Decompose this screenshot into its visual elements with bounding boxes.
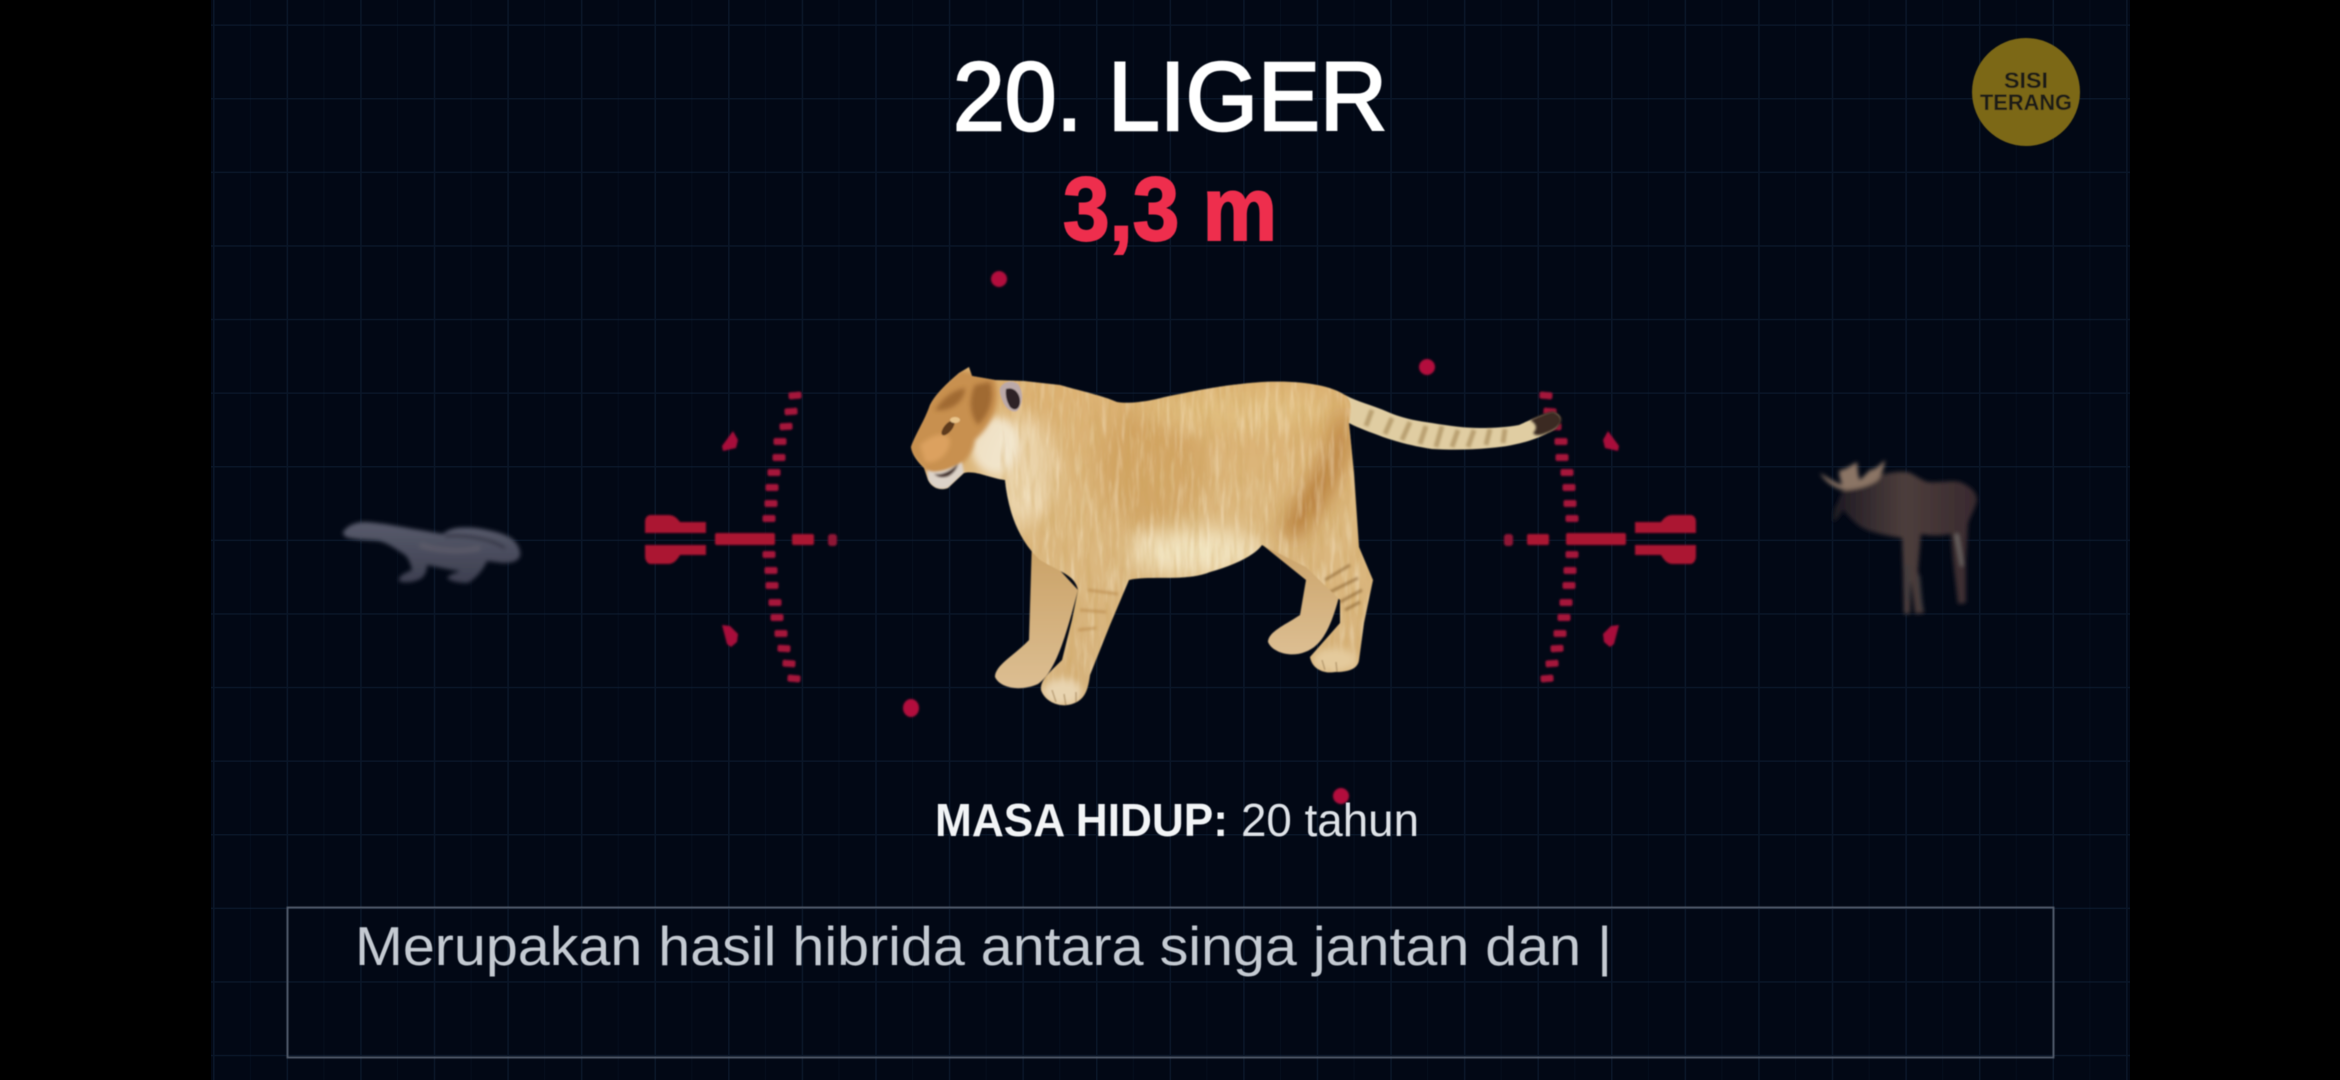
logo: Sisi Terang badge [1972, 38, 2080, 146]
lifespan label [935, 794, 1419, 846]
illustration: moose [1820, 460, 1977, 614]
reticle: left bracket [645, 391, 837, 683]
logo: Sisi Terang badge: TERANG [1980, 90, 2072, 115]
liger ear [1000, 382, 1022, 411]
fur shading and markings [971, 380, 1380, 710]
logo: Sisi Terang badge: SISI [2004, 68, 2048, 93]
lifespan label: 20 tahun [1241, 794, 1419, 846]
title: 20. LIGER [953, 42, 1387, 151]
lifespan label: MASA HIDUP: [935, 794, 1228, 846]
illustration: liger [905, 367, 1562, 710]
caption box [288, 908, 2054, 1058]
liger body [911, 367, 1373, 705]
far hind leg [1250, 530, 1345, 654]
length value: 3,3 m [1063, 160, 1277, 260]
liger tail [1345, 395, 1562, 450]
scattered target dots [903, 271, 1435, 804]
reticle: right bracket [1504, 391, 1696, 683]
caption box: Merupakan hasil hibrida antara singa jantan dan | [355, 915, 1612, 977]
liger head [905, 370, 997, 489]
far front leg [995, 540, 1078, 688]
illustration: komodo dragon [343, 522, 520, 583]
